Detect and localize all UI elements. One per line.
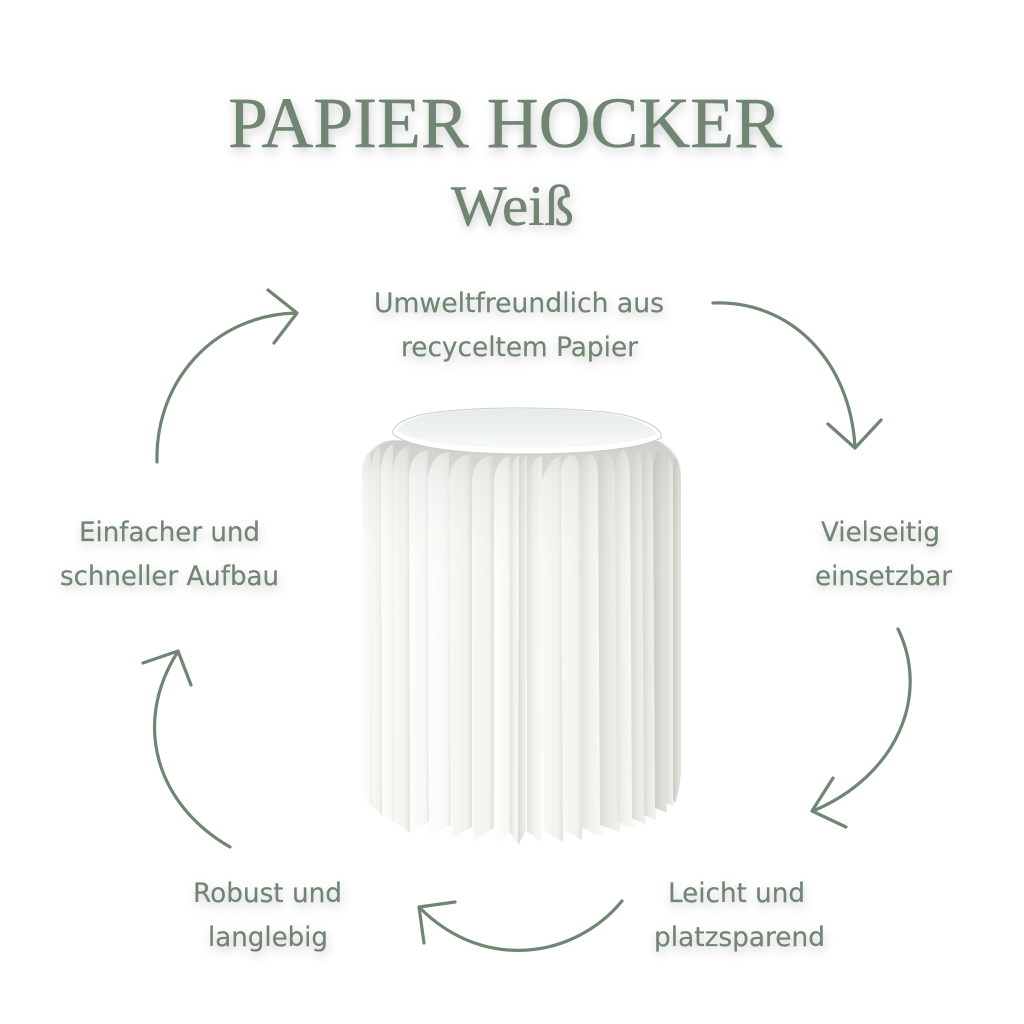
arrow: left [143, 651, 230, 847]
text: Robust und langlebig: Robust und [193, 878, 342, 909]
text: Leicht und platzsparend [654, 878, 825, 953]
text: Einfacher und schneller Aufbau: schneller Aufbau [60, 561, 279, 592]
text: Leicht und platzsparend: platzsparend [654, 922, 825, 953]
subtitle: Weiß [451, 175, 574, 238]
text: Umweltfreundlich aus recyceltem Papier: recyceltem Papier [401, 332, 639, 363]
text: Umweltfreundlich aus recyceltem Papier [374, 288, 664, 363]
text: Leicht und platzsparend: Leicht und [668, 878, 805, 909]
stool backing [364, 440, 680, 520]
arrow: top right [713, 303, 881, 448]
text: Vielseitig einsetzbar [815, 517, 953, 592]
text: Vielseitig einsetzbar: Vielseitig [821, 517, 940, 548]
stool pleats [362, 444, 681, 845]
text: Robust und langlebig: langlebig [208, 922, 328, 953]
paper stool [360, 408, 684, 845]
text: Umweltfreundlich aus recyceltem Papier: Umweltfreundlich aus [374, 288, 664, 319]
arrow: right [812, 629, 910, 827]
text: Robust und langlebig [193, 878, 342, 953]
arrow: bottom [419, 901, 622, 950]
text: Einfacher und schneller Aufbau: Einfacher und [79, 517, 260, 548]
title: PAPIER HOCKER [228, 83, 782, 163]
arrow: top left [157, 290, 297, 462]
stool top shading [362, 441, 681, 486]
stool seat cushion [393, 408, 661, 454]
text: Vielseitig einsetzbar: einsetzbar [815, 561, 953, 592]
text: Einfacher und schneller Aufbau [60, 517, 279, 592]
